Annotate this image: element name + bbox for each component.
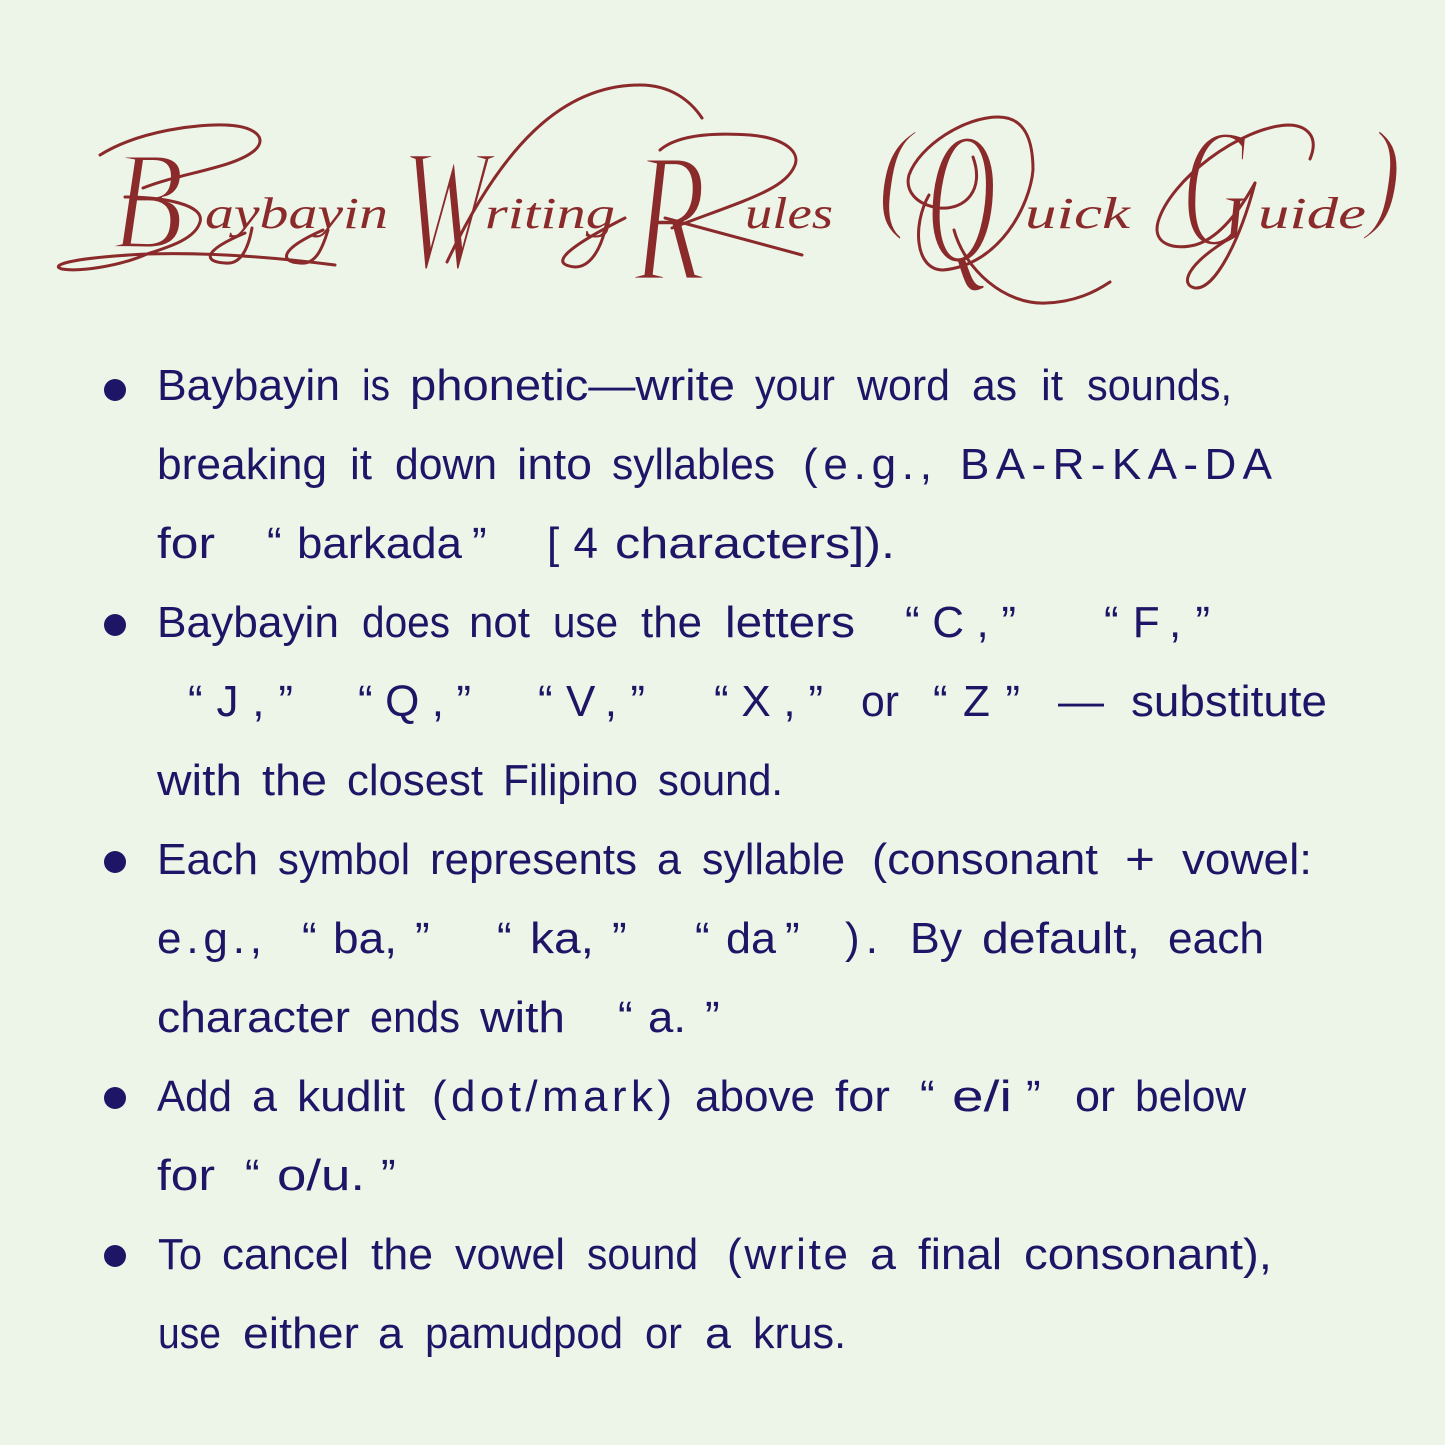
rule 2: unused letters: Filipino xyxy=(503,756,638,805)
rule 4: kudlit: above xyxy=(695,1072,815,1121)
rule 4: kudlit: ” xyxy=(381,1151,396,1200)
title word: (Quick: Q xyxy=(926,93,996,303)
bullet xyxy=(104,1245,126,1267)
rule 1: phonetic writing: as xyxy=(972,361,1017,410)
rule 2: unused letters: “J,” xyxy=(188,677,293,726)
rule 3: symbols are syllables: ” xyxy=(612,914,627,963)
title word: Rules: R xyxy=(633,116,706,321)
rule 1: phonetic writing: is xyxy=(362,361,390,410)
title xyxy=(58,85,1401,321)
rule 4: kudlit: (dot/mark) xyxy=(432,1072,672,1121)
rule 2: unused letters: closest xyxy=(347,756,483,805)
rule 5: cancel vowel: either xyxy=(243,1309,359,1358)
rule 4: kudlit: Add xyxy=(157,1072,232,1121)
rule 2: unused letters: the xyxy=(262,756,327,805)
rule 5: cancel vowel: a xyxy=(378,1309,404,1358)
title word: Guide) xyxy=(1157,95,1401,288)
title word: Guide): G xyxy=(1182,95,1250,283)
rule 5: cancel vowel: krus. xyxy=(753,1309,846,1358)
rule 1: phonetic writing: for xyxy=(157,519,215,568)
title word: Writing xyxy=(402,85,702,306)
title word: Guide): uide xyxy=(1258,189,1366,238)
rule 3: symbols are syllables: “ xyxy=(618,993,633,1042)
rule 5: cancel vowel: To xyxy=(158,1230,202,1279)
rule 1: phonetic writing: breaking xyxy=(157,440,327,489)
rule 3: symbols are syllables: syllable xyxy=(702,835,845,884)
rule 1: phonetic writing xyxy=(104,361,1273,568)
rule 2: unused letters: letters xyxy=(725,598,855,647)
rule 3: symbols are syllables: ” xyxy=(415,914,430,963)
rule 5: cancel vowel: pamudpod xyxy=(425,1309,623,1358)
title word: Baybayin: aybayin xyxy=(205,189,388,238)
rule 3: symbols are syllables: e.g., xyxy=(157,914,262,963)
rule 5: cancel vowel: sound xyxy=(587,1230,698,1279)
rule 4: kudlit: ” xyxy=(1026,1072,1041,1121)
rule 3: symbols are syllables: vowel: xyxy=(1182,835,1312,884)
rule 1: phonetic writing: down xyxy=(395,440,497,489)
rule 1: phonetic writing: sounds, xyxy=(1087,361,1232,410)
rule 3: symbols are syllables: “ xyxy=(695,914,710,963)
rule 5: cancel vowel: a xyxy=(870,1230,897,1279)
rule 2: unused letters: use xyxy=(553,598,618,647)
rule 2: unused letters: “Z” xyxy=(933,677,1020,726)
rule 5: cancel vowel: final xyxy=(918,1230,1002,1279)
rule 2: unused letters: substitute xyxy=(1131,677,1327,726)
rule 5: cancel vowel: or xyxy=(645,1309,682,1358)
rule 2: unused letters: not xyxy=(469,598,530,647)
rule 5: cancel vowel: use xyxy=(158,1309,221,1358)
rule 5: cancel vowel: the xyxy=(371,1230,433,1279)
rule 1: phonetic writing: (e.g., xyxy=(803,440,932,489)
rule 4: kudlit: or xyxy=(1075,1072,1115,1121)
bullet xyxy=(104,614,126,636)
title word: Guide): ) xyxy=(1361,105,1401,242)
rule 2: unused letters: the xyxy=(641,598,702,647)
rule 3: symbols are syllables: By xyxy=(910,914,962,963)
rule 4: kudlit: “ xyxy=(920,1072,935,1121)
rule 1: phonetic writing: it xyxy=(350,440,372,489)
rule 3: symbols are syllables: with xyxy=(479,993,565,1042)
rule 3: symbols are syllables: (consonant xyxy=(872,835,1098,884)
rule 4: kudlit: for xyxy=(835,1072,890,1121)
rule 4: kudlit: below xyxy=(1135,1072,1246,1121)
rule 1: phonetic writing: syllables xyxy=(612,440,775,489)
rule 2: unused letters: Baybayin xyxy=(157,598,339,647)
rule 3: symbols are syllables: ends xyxy=(370,993,460,1042)
rule 3: symbols are syllables: ka, xyxy=(530,914,594,963)
rule 2: unused letters: does xyxy=(362,598,450,647)
rule 2: unused letters: “F,” xyxy=(1104,598,1210,647)
rule 2: unused letters: sound. xyxy=(658,756,783,805)
rule 2: unused letters: — xyxy=(1058,677,1104,726)
bullet xyxy=(104,851,126,873)
rule 3: symbols are syllables: Each xyxy=(157,835,258,884)
rule 3: symbols are syllables xyxy=(104,835,1312,1042)
rule 1: phonetic writing: characters]). xyxy=(615,519,895,568)
rule 4: kudlit: e/i xyxy=(952,1072,1012,1121)
bullet xyxy=(104,379,126,401)
rule 5: cancel vowel xyxy=(104,1230,1272,1358)
rule 2: unused letters: “Q,” xyxy=(358,677,471,726)
rule 5: cancel vowel: (write xyxy=(727,1230,848,1279)
rule 2: unused letters: or xyxy=(861,677,899,726)
rule 1: phonetic writing: BA-R-KA-DA xyxy=(960,440,1273,489)
rule 3: symbols are syllables: default, xyxy=(982,914,1140,963)
rule 3: symbols are syllables: ba, xyxy=(333,914,397,963)
rule 4: kudlit: a xyxy=(252,1072,278,1121)
rule 2: unused letters xyxy=(104,598,1327,805)
rule 3: symbols are syllables: + xyxy=(1125,835,1155,884)
title word: Rules: ules xyxy=(745,189,833,238)
rule 1: phonetic writing: word xyxy=(856,361,950,410)
rule 5: cancel vowel: vowel xyxy=(455,1230,565,1279)
title word: (Quick: ( xyxy=(878,105,918,242)
rule 1: phonetic writing: into xyxy=(517,440,592,489)
rule 1: phonetic writing: barkada xyxy=(297,519,463,568)
title word: Baybayin: B xyxy=(112,122,184,279)
rule 2: unused letters: “V,” xyxy=(538,677,645,726)
rule 3: symbols are syllables: “ xyxy=(302,914,317,963)
title word: Writing: riting xyxy=(485,189,615,238)
rule 1: phonetic writing: Baybayin xyxy=(157,361,340,410)
rule 3: symbols are syllables: da xyxy=(726,914,777,963)
title word: Rules xyxy=(633,116,833,321)
rule 4: kudlit: “ xyxy=(245,1151,260,1200)
rule 4: kudlit: kudlit xyxy=(297,1072,405,1121)
rule 4: kudlit xyxy=(104,1072,1246,1200)
rule 2: unused letters: with xyxy=(156,756,242,805)
rule 1: phonetic writing: it xyxy=(1041,361,1063,410)
rule 3: symbols are syllables: symbol xyxy=(278,835,410,884)
title word: Writing: W xyxy=(402,114,496,306)
rule 3: symbols are syllables: ). xyxy=(845,914,878,963)
rule 5: cancel vowel: a xyxy=(705,1309,732,1358)
rule 2: unused letters: “C,” xyxy=(905,598,1016,647)
rule 5: cancel vowel: cancel xyxy=(222,1230,349,1279)
title word: Baybayin xyxy=(58,122,388,279)
rule 1: phonetic writing: your xyxy=(755,361,835,410)
rule list xyxy=(104,361,1327,1358)
rule 3: symbols are syllables: ” xyxy=(705,993,720,1042)
rule 3: symbols are syllables: “ xyxy=(497,914,512,963)
bullet xyxy=(104,1087,126,1109)
rule 3: symbols are syllables: represents xyxy=(430,835,637,884)
rule 2: unused letters: “X,” xyxy=(714,677,823,726)
rule 1: phonetic writing: [4 xyxy=(547,519,598,568)
rule 1: phonetic writing: phonetic—write xyxy=(410,361,735,410)
rule 5: cancel vowel: consonant), xyxy=(1024,1230,1272,1279)
rule 1: phonetic writing: ” xyxy=(472,519,487,568)
title word: (Quick: uick xyxy=(1025,189,1132,238)
rule 3: symbols are syllables: a xyxy=(657,835,682,884)
rule 4: kudlit: for xyxy=(157,1151,215,1200)
rule 1: phonetic writing: “ xyxy=(267,519,282,568)
rule 3: symbols are syllables: ” xyxy=(785,914,800,963)
rule 3: symbols are syllables: a. xyxy=(648,993,686,1042)
title word: (Quick xyxy=(878,93,1132,303)
rule 3: symbols are syllables: each xyxy=(1168,914,1264,963)
rule 3: symbols are syllables: character xyxy=(157,993,350,1042)
rule 4: kudlit: o/u. xyxy=(277,1151,365,1200)
